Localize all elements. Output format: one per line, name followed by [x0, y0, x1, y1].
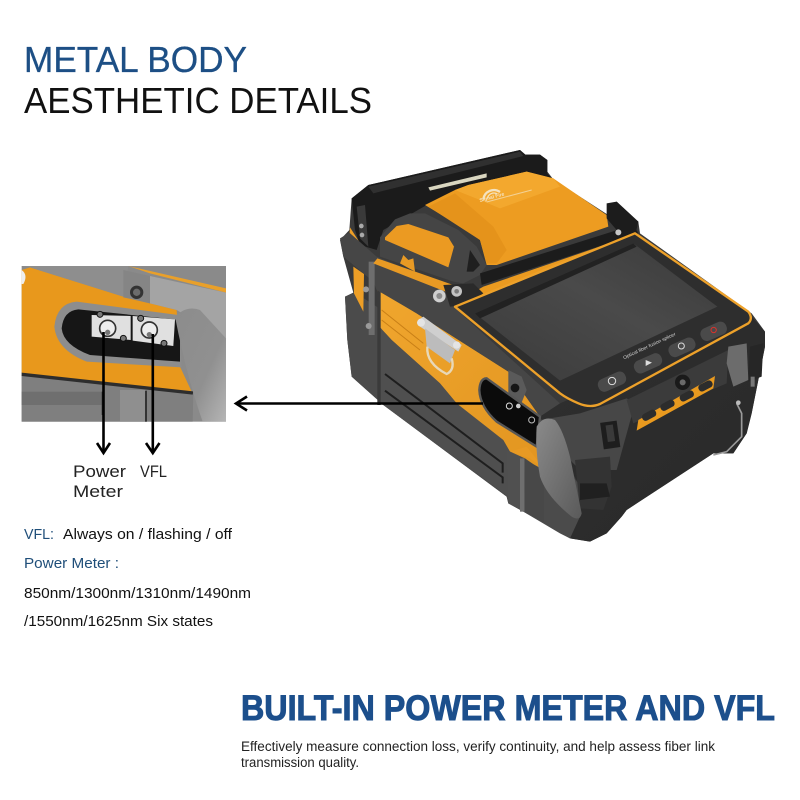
VFL port	[133, 315, 175, 346]
grey side flap	[536, 418, 582, 519]
text block: port states: VFL:	[24, 527, 54, 543]
arrow: VFL	[146, 334, 160, 453]
description text: transmission quality.	[241, 755, 359, 770]
arrow: product to close-up	[236, 396, 483, 410]
hinge screws	[359, 224, 621, 329]
grey diagonal wedge	[379, 327, 510, 497]
logo on cover	[479, 190, 532, 204]
lower side shell	[345, 293, 580, 538]
panel: port close-up	[22, 266, 226, 422]
right front face	[540, 317, 765, 542]
back hinge	[352, 150, 553, 250]
bolt	[130, 286, 143, 299]
title: AESTHETIC DETAILS	[24, 80, 372, 121]
text block: port states: /1550nm/1625nm Six states	[24, 614, 213, 630]
port recess	[54, 302, 182, 367]
orange side panel	[377, 289, 544, 470]
text block: port states	[24, 527, 251, 630]
rear seam	[377, 290, 381, 405]
logo on cover: Signal Fire	[479, 191, 505, 204]
arrow: power meter	[97, 332, 110, 453]
title	[24, 39, 372, 121]
front wedge	[380, 213, 487, 283]
text block: port states: Power Meter :	[24, 556, 119, 572]
product photo: fusion splicer	[340, 150, 765, 542]
power meter port	[92, 311, 131, 341]
vertical seam	[507, 450, 525, 512]
title: METAL BODY	[24, 39, 247, 80]
side ridge lines	[385, 374, 503, 483]
lower grey shell	[22, 375, 193, 422]
top plate with hinge bar	[340, 202, 640, 417]
device silhouette	[340, 150, 765, 542]
screen bezel	[455, 233, 751, 406]
orange panel fold lines	[382, 310, 423, 350]
label: power meter: Power	[73, 462, 126, 481]
side port opening	[479, 370, 540, 447]
grey flap in close-up	[175, 308, 226, 422]
screen buttons: Optical fiber fusion splicer	[622, 331, 677, 360]
label: power meter: Meter	[73, 482, 123, 501]
description text: Effectively measure connection loss, verify continuity, and help assess fiber link	[241, 739, 715, 754]
text block: port states: 850nm/1300nm/1310nm/1490nm	[24, 586, 251, 602]
latch	[417, 317, 462, 374]
orange side panel in close-up	[22, 267, 192, 392]
orange port strip with buttons	[637, 375, 715, 431]
orange cover	[425, 172, 608, 265]
text block: port states: Always on / flashing / off	[63, 527, 233, 543]
screen buttons	[596, 320, 729, 394]
label: VFL: VFL	[140, 462, 167, 481]
label: power meter	[73, 462, 126, 501]
description text	[241, 739, 715, 770]
